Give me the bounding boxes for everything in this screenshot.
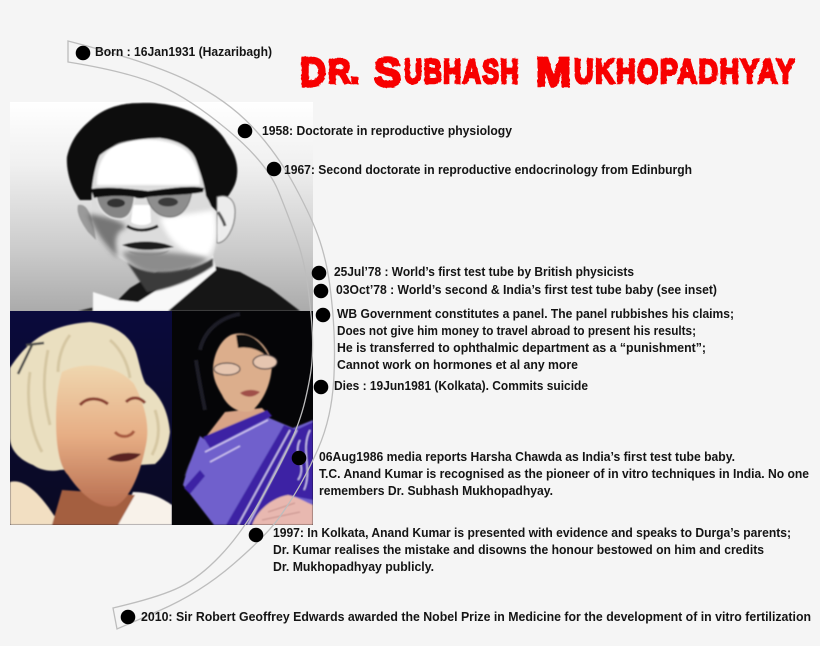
lit forehead [97,140,200,185]
photo: elderly woman [10,311,172,525]
title [300,49,796,95]
event: born 1931: Born : 16Jan1931 (Hazaribagh) [95,45,272,59]
event: 1986 media reports: T.C. Anand Kumar is recognised as the pioneer of in vitro techniques in India. No one [319,467,809,481]
sari [183,417,313,525]
face base [92,138,216,271]
neck shadow [127,258,213,292]
hair highlights [196,314,240,410]
lower face shade [122,251,208,274]
mouth [122,241,174,250]
hand [252,495,313,525]
spectacles [214,355,277,375]
sari stripes [205,420,310,525]
title: D [300,49,326,95]
collar [93,255,216,311]
hair [67,103,237,212]
event: 1986 media reports: 06Aug1986 media reports Harsha Chawda as India’s first test tube baby. [319,450,735,464]
face [56,366,147,507]
event: 1967 second doctorate: 1967: Second doctorate in reproductive endocrinology from Edinburgh [284,163,692,177]
spectacles on head [18,343,44,374]
right cheek light [160,210,216,258]
title: S [374,49,401,95]
photo: Dr. Mukhopadhyay portrait [10,102,313,311]
timeline arc band [68,41,334,629]
event: 1958 doctorate: 1958: Doctorate in reproductive physiology [262,124,512,138]
event: 1986 media reports: remembers Dr. Subhash Mukhopadhyay. [319,484,553,498]
title: M [536,49,571,95]
event: 1997 Kolkata [249,526,791,574]
chest [206,407,266,436]
event: 1997 Kolkata: Dr. Mukhopadhyay publicly. [273,560,434,574]
event: 1986 media reports [292,450,809,498]
gown [165,266,300,311]
ear/jaw left [78,205,96,240]
ear right [217,196,235,243]
face [213,333,272,412]
event: WB Government panel [316,307,734,372]
event: 2010 Nobel Prize: 2010: Sir Robert Geoffrey Edwards awarded the Nobel Prize in Medicine for the development of in vitro fertilization [141,610,811,624]
glasses [96,192,135,219]
event: 25 Jul 1978: 25Jul’78 : World’s first test tube by British physicists [334,265,634,279]
shawl left [10,481,60,525]
event: death 1981: Dies : 19Jun1981 (Kolkata). Commits suicide [334,379,588,393]
event: WB Government panel: Does not give him money to travel abroad to present his results; [337,324,696,338]
mouth [107,453,141,462]
white hair [10,322,170,471]
event: WB Government panel: WB Government constitutes a panel. The panel rubbishes his claims; [337,307,734,321]
event: 1997 Kolkata: 1997: In Kolkata, Anand Kumar is presented with evidence and speaks to Durga’s parents; [273,526,791,540]
photo: woman in purple sari [172,311,313,525]
title: R. [328,53,359,91]
neck [52,490,135,525]
nose [131,205,151,225]
shawl right [118,492,172,525]
left cheek shade [88,214,126,258]
mouth [240,390,260,397]
event: WB Government panel: He is transferred to ophthalmic department as a “punishment”; [337,341,706,355]
eyes [80,398,145,405]
nose [115,431,134,436]
event: 1997 Kolkata: Dr. Kumar realises the mistake and disowns the honour bestowed on him and credits [273,543,764,557]
hair shading [28,335,158,455]
title: UBHASH [404,53,520,91]
event: 03 Oct 1978: 03Oct’78 : World’s second & India’s first test tube baby (see inset) [336,283,717,297]
event: WB Government panel: Cannot work on hormones et al any more [337,358,578,372]
